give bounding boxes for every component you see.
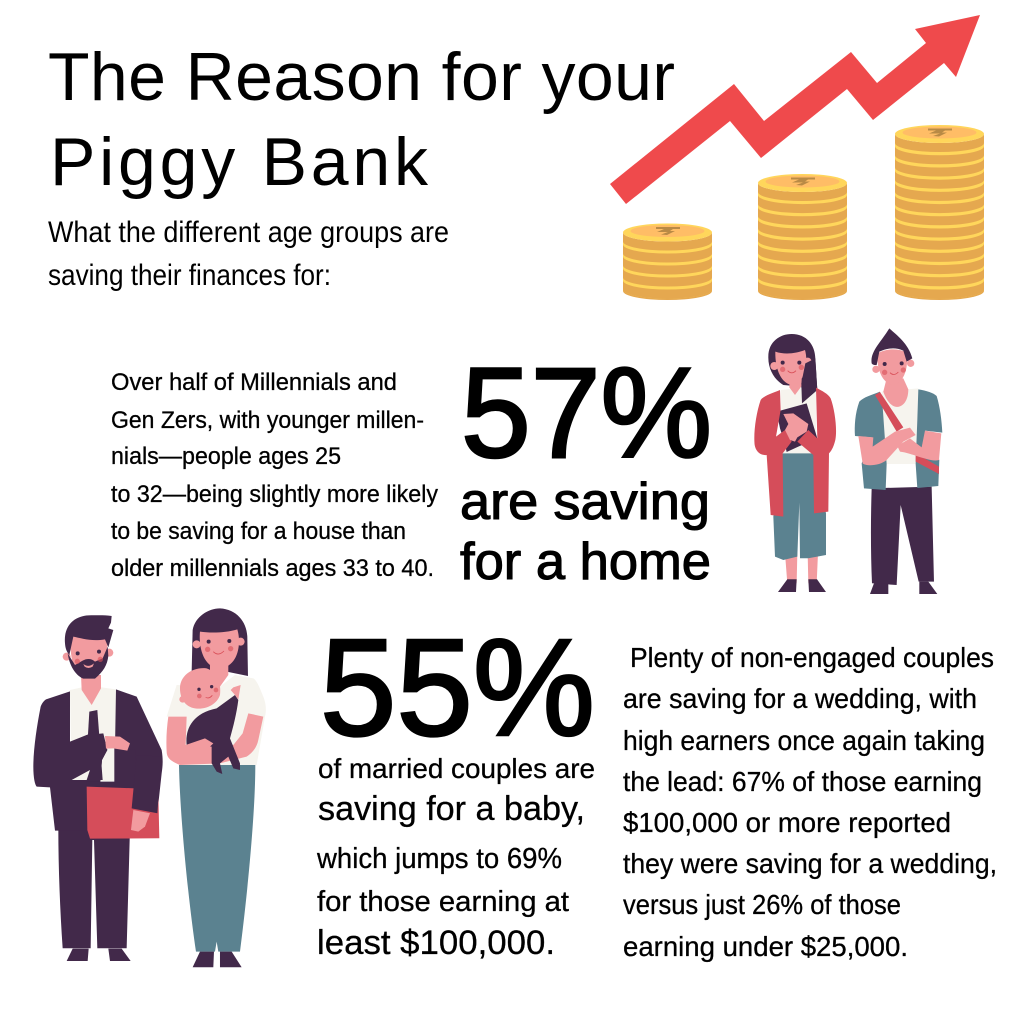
text block: wedding savings paragraph: the lead: 67% of those earning <box>623 766 982 797</box>
stat: 55 percent saving for a baby: saving for a baby, <box>318 790 585 828</box>
text block: wedding savings paragraph: Plenty of non-engaged couples <box>630 642 994 673</box>
text block: millennials home paragraph: older millennials ages 33 to 40. <box>111 555 434 582</box>
text block: millennials home paragraph: Gen Zers, with younger millen- <box>111 407 424 434</box>
stat: 57 percent saving for a home: are saving <box>460 473 710 531</box>
text block: wedding savings paragraph: versus just 26% of those <box>623 889 901 920</box>
illustration: man with red folder <box>33 615 163 961</box>
icon: medium coin stack <box>758 174 847 300</box>
stat: 57 percent saving for a home: 57% <box>461 342 712 485</box>
text block: wedding savings paragraph: they were saving for a wedding, <box>623 848 997 879</box>
stat: 57 percent saving for a home: for a home <box>460 533 711 591</box>
text block: millennials home paragraph: to be saving for a house than <box>111 518 406 545</box>
text block: wedding savings paragraph: are saving for a wedding, with <box>623 683 977 714</box>
icon: small coin stack <box>623 224 712 300</box>
text block: millennials home paragraph <box>111 369 438 582</box>
stat: 55 percent saving for a baby: least $100,000. <box>317 924 555 962</box>
illustration: young woman with tablet <box>754 334 836 592</box>
stat: 55 percent saving for a baby <box>316 611 595 962</box>
title: Piggy Bank <box>50 124 429 200</box>
stat: 57 percent saving for a home <box>460 342 712 591</box>
stat: 55 percent saving for a baby: 55% <box>320 611 595 765</box>
stat: 55 percent saving for a baby: of married couples are <box>318 753 595 784</box>
text block: millennials home paragraph: Over half of Millennials and <box>111 369 397 396</box>
subtitle <box>48 216 449 292</box>
icon: tall coin stack <box>895 125 984 300</box>
illustration: woman holding baby <box>166 608 266 967</box>
icon: rising red arrow <box>610 15 980 204</box>
stat: 55 percent saving for a baby: which jumps to 69% <box>316 843 562 875</box>
text block: wedding savings paragraph: high earners once again taking <box>623 725 985 756</box>
text block: wedding savings paragraph <box>623 642 997 962</box>
text block: millennials home paragraph: to 32—being slightly more likely <box>111 481 438 508</box>
text block: wedding savings paragraph: $100,000 or more reported <box>623 807 951 838</box>
subtitle: What the different age groups are <box>48 216 449 249</box>
subtitle: saving their finances for: <box>48 259 331 292</box>
title: The Reason for your <box>48 39 675 115</box>
stat: 55 percent saving for a baby: for those earning at <box>317 886 569 918</box>
text block: wedding savings paragraph: earning under $25,000. <box>623 931 908 962</box>
title <box>48 39 675 200</box>
illustration: young man with satchel <box>855 328 942 594</box>
text block: millennials home paragraph: nials—people ages 25 <box>111 443 341 470</box>
